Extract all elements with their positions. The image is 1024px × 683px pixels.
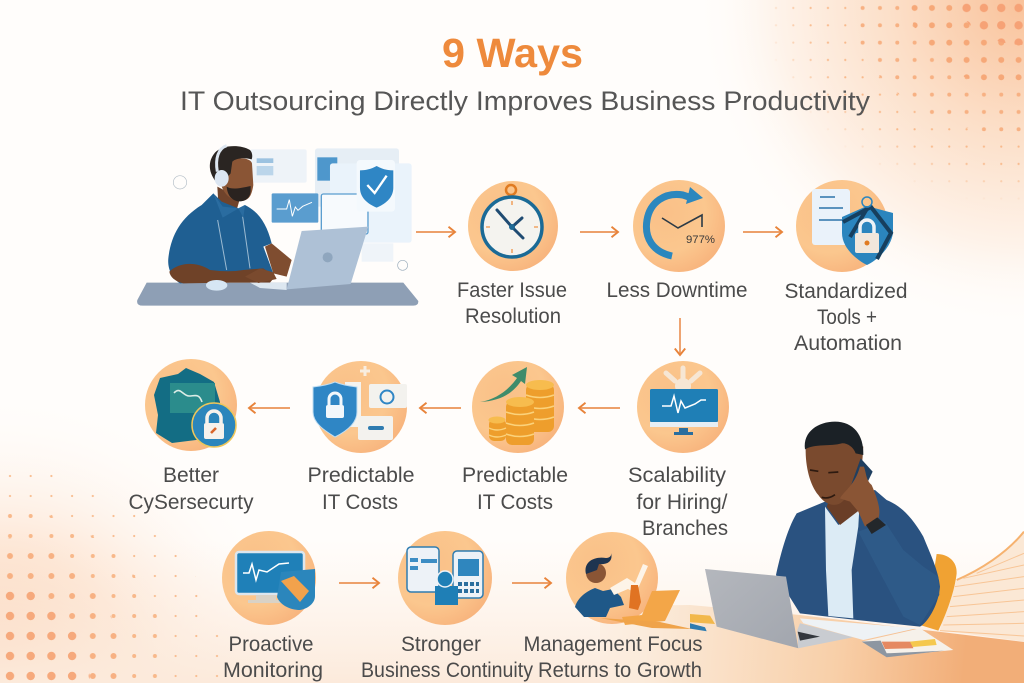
label: Predictable: [462, 464, 568, 487]
label: Resolution: [465, 305, 561, 328]
illustration: manager on phone at laptop: [600, 422, 1024, 683]
arrow: down to scalability: [679, 318, 681, 355]
label: [361, 633, 533, 682]
label: [462, 464, 568, 514]
label: Returns to Growth: [538, 659, 702, 682]
icon: checklist and lock shield: [796, 180, 893, 272]
icon: monitor and orange tag shield: [222, 531, 316, 625]
step: predictable IT costs (coins): [462, 361, 568, 514]
icon: stopwatch: [468, 181, 558, 271]
label: Tools +: [817, 306, 877, 329]
phone: [847, 458, 873, 507]
step: stronger business continuity: [361, 531, 533, 682]
icon: monitor with pulse: [637, 361, 729, 453]
icon: teal bag with padlock: [145, 359, 237, 451]
desk: [600, 605, 1024, 683]
label: for Hiring/: [636, 491, 728, 514]
arrow: start to faster issue resolution: [416, 231, 455, 233]
arrow: to less downtime: [580, 231, 618, 233]
step: proactive monitoring: [222, 531, 323, 682]
label: Faster Issue: [457, 279, 567, 302]
head: [806, 441, 863, 505]
label: [308, 464, 414, 514]
label: [457, 279, 567, 328]
chair: [920, 554, 957, 631]
illustration: IT support technician at laptop: [137, 146, 418, 306]
arrow: to coin stacks: [579, 407, 620, 409]
hand and wrist: [840, 467, 879, 527]
arrow: to management focus: [512, 582, 551, 584]
label: [223, 633, 323, 682]
papers and books: [690, 614, 953, 657]
laptop: [705, 569, 853, 648]
step: standardized tools + automation: [784, 180, 908, 355]
wave lines decoration: [940, 532, 1024, 642]
label: Stronger: [401, 633, 481, 656]
label: Better: [163, 464, 219, 487]
label: [628, 464, 728, 540]
shirt: [825, 507, 859, 618]
icon: coin stacks with growth arrow: [472, 361, 564, 453]
label: Scalability: [628, 464, 727, 487]
icon: manager with growth line and laptop: [566, 532, 692, 629]
label: IT Costs: [477, 491, 553, 514]
step: less downtime: [606, 180, 748, 302]
title: 9 Ways: [442, 30, 583, 76]
label: Monitoring: [223, 659, 323, 682]
sleeve: [858, 522, 939, 625]
icon: clock with uptime arrow: [633, 180, 725, 272]
facial features: [810, 470, 838, 498]
watch: [866, 517, 886, 534]
label: [784, 280, 908, 355]
jacket: [776, 490, 940, 627]
label: CySersecurty: [128, 491, 254, 514]
label: IT Costs: [322, 491, 398, 514]
label: Business Continuity: [361, 659, 533, 682]
icon: devices and person badge: [398, 531, 492, 625]
step: better cybersecurity: [128, 359, 254, 514]
label: [128, 464, 254, 514]
step: scalability for hiring and branches: [628, 361, 729, 540]
neck: [827, 490, 862, 525]
label: [524, 633, 702, 682]
hair: [805, 422, 863, 455]
label: Predictable: [308, 464, 414, 487]
label: Management Focus: [524, 633, 702, 656]
label: Proactive: [228, 633, 314, 656]
label: Automation: [794, 332, 902, 355]
arrow: to better cybersecurity: [249, 407, 290, 409]
step: predictable IT costs (shield): [308, 361, 414, 514]
arrow: to business continuity: [339, 582, 379, 584]
arrow: to predictable costs shield: [420, 407, 461, 409]
arrow: to standardized tools: [743, 231, 782, 233]
label: Standardized: [784, 280, 908, 303]
step: faster issue resolution: [457, 181, 567, 328]
label: Branches: [642, 517, 728, 540]
icon: clock with uptime arrow: 977%: [686, 234, 715, 246]
icon: lock shield and cards: [313, 361, 407, 453]
step: management focus returns to growth: [524, 532, 702, 682]
subtitle: IT Outsourcing Directly Improves Business Productivity: [180, 86, 871, 116]
label: Less Downtime: [606, 279, 748, 302]
